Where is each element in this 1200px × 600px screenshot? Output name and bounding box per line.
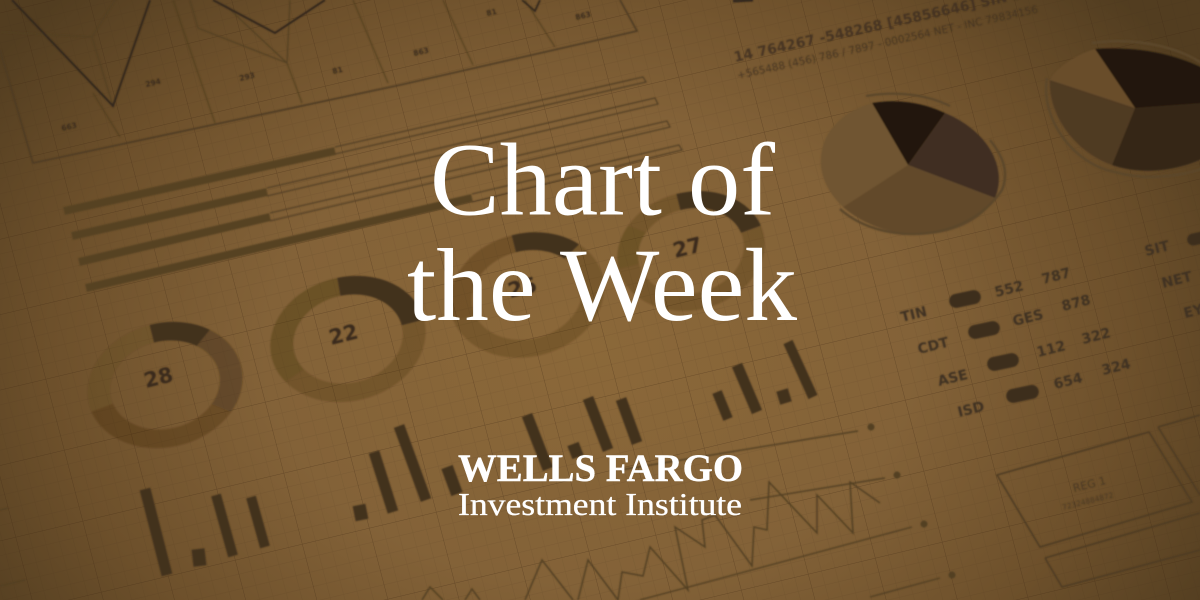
table: labelled pills: CDT (916, 335, 951, 358)
label: 22: 22 (326, 319, 361, 350)
title (407, 122, 797, 343)
donut chart: 22 (270, 271, 426, 407)
label: middle donut: 25 (505, 272, 540, 303)
line chart: top left with table frame: 293 (238, 71, 256, 83)
table: labelled pills: 324 (1100, 356, 1133, 379)
table: labelled pills: NET (1160, 269, 1194, 292)
horizontal bars with outlines (64, 77, 682, 288)
logo: Wells Fargo Investment Institute (458, 447, 743, 522)
line chart: top left with table frame: 663 (60, 121, 78, 133)
line chart: top left with table frame: 863 (574, 10, 592, 22)
line chart: top left with table frame: 294 (144, 77, 162, 89)
boxes: REG 1: REG 1 (1072, 474, 1107, 495)
pie chart: right (1046, 41, 1200, 177)
bar chart: group 2 (359, 415, 578, 520)
table: labelled pills: 878 (1060, 292, 1092, 315)
logo: Wells Fargo Investment Institute: WELLS FARGO (458, 447, 743, 490)
label: 27: 27 (670, 232, 705, 263)
donut chart: middle (449, 227, 605, 363)
table: labelled pills: ASE (936, 367, 970, 390)
table: labelled pills: 112 (1035, 338, 1067, 361)
line chart: top left with table frame: 81 (331, 65, 344, 76)
line chart: top left with table frame: 81 (485, 7, 498, 18)
table: labelled pills: 654 (1052, 370, 1085, 393)
table: labelled pills: GES (1011, 307, 1045, 330)
table: labelled pills: 787 (1040, 265, 1072, 288)
table: labelled pills: 322 (1080, 325, 1112, 348)
line chart: top left with table frame: 863 (412, 46, 430, 58)
line chart: zigzag (422, 482, 880, 600)
title: Chart of (430, 122, 775, 238)
text: data header lines: +565488 (456) 786 / 7897 - 0002564 NET - INC 79834156 (736, 4, 1039, 82)
line chart: top left with table frame (0, 0, 753, 163)
donut chart: 28 (87, 317, 243, 453)
table: labelled pills: TIN (899, 304, 929, 326)
label: 28: 28 (141, 362, 176, 393)
donut chart: 27 (617, 186, 765, 316)
title: the Week (407, 228, 797, 343)
bar chart: group 1 (145, 489, 265, 575)
timelines with dots (0, 424, 956, 600)
boxes: REG 1: 72324884872 (1061, 490, 1115, 512)
table: labelled pills: SIT (1143, 238, 1172, 260)
logo: Wells Fargo Investment Institute: Investment Institute (458, 486, 742, 522)
table: labelled pills: ISD (956, 399, 986, 421)
pie chart: left (821, 94, 1005, 234)
table: labelled pills: 552 (993, 278, 1025, 301)
boxes: REG 1 (997, 415, 1200, 587)
table: labelled pills (899, 229, 1200, 421)
bar chart: group 3 (588, 342, 813, 450)
